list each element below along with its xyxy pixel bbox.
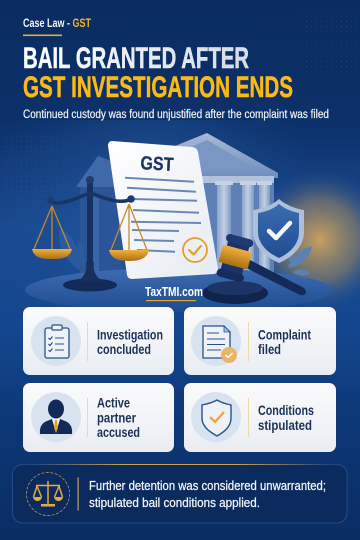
card label: Complaint bbox=[258, 328, 311, 342]
watermark: TaxTMI.com: TaxTMI.com bbox=[145, 285, 203, 299]
card: Complaint filed bbox=[184, 307, 336, 375]
document heading: GST: GST bbox=[140, 153, 174, 176]
eyebrow: Case Law - GST: Case Law - GST bbox=[23, 18, 91, 30]
eyebrow rule bbox=[23, 34, 62, 36]
platform bbox=[25, 268, 333, 312]
card label bbox=[258, 328, 311, 357]
court building: left bbox=[76, 156, 122, 279]
card label: partner bbox=[97, 411, 137, 426]
card: Conditions stipulated bbox=[184, 383, 336, 452]
title bbox=[23, 42, 293, 104]
watermark underline bbox=[146, 300, 196, 301]
icon: person in suit bbox=[31, 392, 81, 442]
card label: Conditions bbox=[258, 403, 314, 418]
card label: accused bbox=[97, 425, 140, 440]
callout text bbox=[89, 478, 326, 510]
icon: clipboard checklist bbox=[31, 316, 81, 366]
card label: stipulated bbox=[258, 418, 312, 433]
gavel bbox=[202, 233, 306, 304]
card label: Active bbox=[97, 396, 130, 411]
scales of justice bbox=[32, 176, 149, 292]
icon: document with check bbox=[191, 316, 241, 366]
GST document bbox=[108, 141, 218, 279]
document text lines bbox=[125, 178, 201, 252]
icon: scales in dashed circle bbox=[26, 472, 70, 516]
document check stamp bbox=[183, 238, 207, 262]
card: Investigation concluded bbox=[23, 307, 174, 375]
card label bbox=[97, 396, 140, 440]
panel: conclusion callout bbox=[12, 464, 347, 523]
leaves: right bbox=[288, 246, 312, 275]
callout text: Further detention was considered unwarranted; bbox=[89, 478, 326, 493]
card label bbox=[97, 328, 163, 357]
title line 1: BAIL GRANTED AFTER bbox=[23, 42, 249, 75]
card label bbox=[258, 403, 314, 433]
leaves: left bbox=[59, 228, 85, 270]
shield bbox=[253, 199, 304, 263]
card label: Investigation bbox=[97, 328, 163, 342]
hero illustration bbox=[25, 133, 333, 312]
court building: right bbox=[170, 133, 278, 280]
card label: filed bbox=[258, 342, 281, 357]
card label: concluded bbox=[97, 342, 151, 357]
callout text: stipulated bail conditions applied. bbox=[89, 495, 260, 510]
card: Active partner accused bbox=[23, 383, 174, 452]
icon: shield with check bbox=[191, 392, 241, 442]
